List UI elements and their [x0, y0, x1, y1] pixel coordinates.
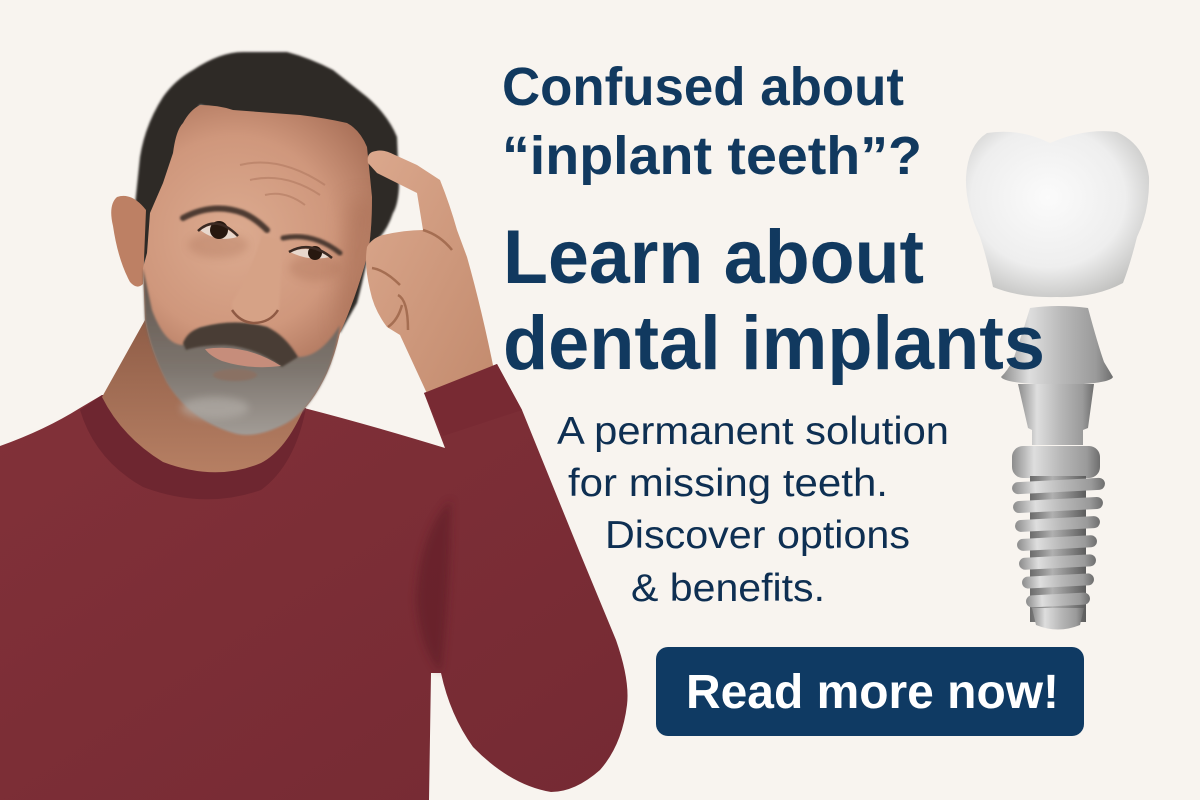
- abutment: [1001, 306, 1113, 385]
- body text: [557, 410, 949, 610]
- hair: [135, 52, 399, 333]
- sleeve cuff: [424, 364, 522, 436]
- screw threads: [1012, 478, 1105, 608]
- body text: Discover options: [605, 514, 910, 557]
- heading: learn about dental implants: [503, 215, 1045, 386]
- screw core: [1030, 476, 1086, 622]
- knuckle lines: [372, 230, 452, 330]
- forehead wrinkles: [240, 162, 325, 205]
- facial shading: [189, 205, 369, 306]
- body text: A permanent solution: [557, 410, 949, 453]
- button: read more now: [656, 647, 1084, 736]
- body text: & benefits.: [631, 567, 825, 610]
- shirt with raised sleeve: [0, 364, 628, 800]
- nose: [232, 235, 281, 323]
- body text: for missing teeth.: [568, 462, 888, 505]
- chin highlight: [181, 397, 249, 419]
- collar: [80, 395, 306, 499]
- eyes and brows: [183, 209, 340, 260]
- abutment stem: [1018, 384, 1094, 445]
- mouth: [205, 348, 281, 367]
- ear: [111, 196, 146, 287]
- screw tip: [1032, 608, 1084, 630]
- heading: confused about: [502, 57, 922, 186]
- face: [143, 105, 372, 435]
- button: read more now: Read more now!: [686, 666, 1059, 719]
- neck: [102, 320, 345, 472]
- sleeve crease shading: [416, 500, 451, 673]
- heading: confused about: Confused about: [502, 57, 904, 117]
- tooth crown: [966, 131, 1149, 297]
- heading: confused about: “inplant teeth”?: [502, 126, 922, 186]
- heading: learn about dental implants: dental implants: [503, 301, 1045, 386]
- heading: learn about dental implants: Learn about: [503, 215, 924, 300]
- implant head: [1012, 446, 1100, 478]
- moustache: [183, 322, 298, 367]
- under-lip patch: [213, 369, 257, 381]
- man illustration: [0, 52, 628, 800]
- dental implant illustration: [966, 131, 1149, 630]
- hand scratching head: [366, 150, 495, 400]
- beard: [143, 268, 340, 435]
